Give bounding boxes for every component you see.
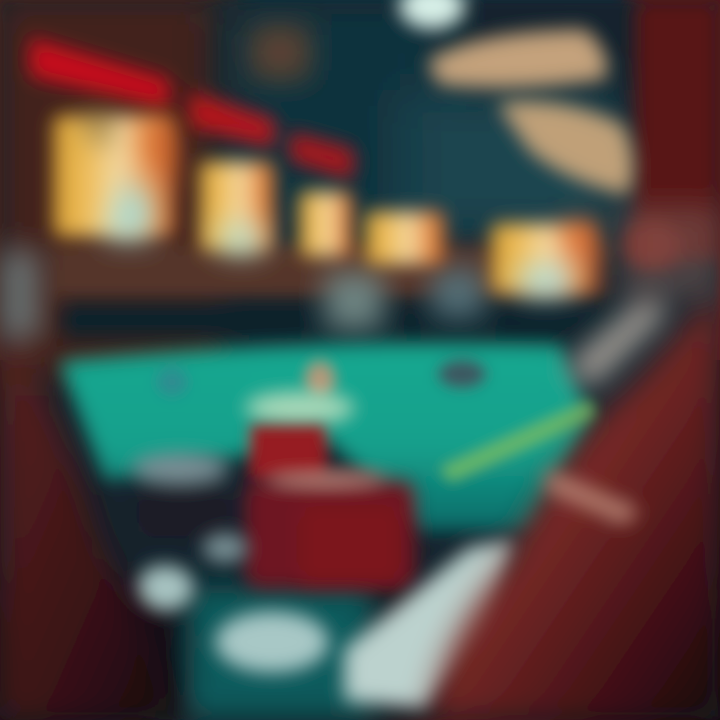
white chips and cards	[137, 534, 515, 708]
ceiling light	[400, 0, 464, 28]
right foreground arm	[430, 205, 720, 720]
red chip stacks	[245, 424, 415, 588]
slot machine cabinets	[52, 245, 612, 338]
glowing screens	[54, 112, 594, 294]
lower table teal floor	[185, 585, 375, 720]
red awnings	[30, 38, 354, 180]
dark chip stack	[132, 454, 230, 540]
green table	[60, 343, 596, 530]
left foreground arm	[0, 250, 172, 720]
tan lamp shades	[428, 30, 633, 195]
